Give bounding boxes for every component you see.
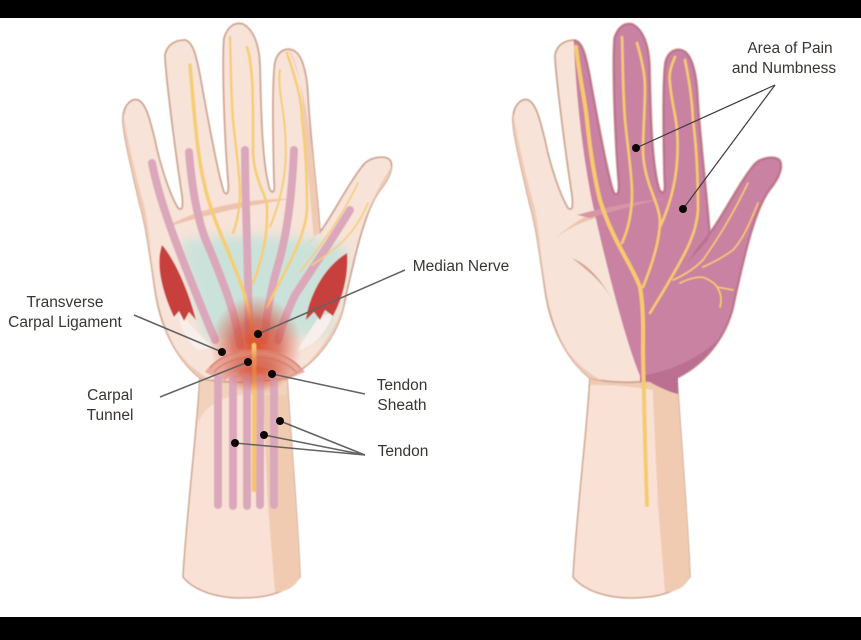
label: Area of Pain and Numbness bbox=[732, 40, 836, 77]
label: Carpal Tunnel: Tunnel bbox=[87, 407, 133, 424]
carpal glow bbox=[210, 295, 302, 395]
leader lines right bbox=[636, 85, 775, 209]
forearm tendons bbox=[218, 378, 274, 506]
left thenar muscle bbox=[159, 245, 213, 350]
carpal ligament band bbox=[205, 350, 305, 381]
leader lines left bbox=[134, 270, 405, 455]
palm tendons bbox=[152, 150, 350, 345]
right forearm bbox=[573, 375, 690, 598]
left hand silhouette bbox=[115, 23, 400, 390]
palm teal area bbox=[180, 236, 348, 340]
forearm median nerve bbox=[252, 345, 257, 490]
left hand anatomy illustration bbox=[115, 23, 400, 598]
top black bar bbox=[0, 0, 861, 18]
label: Carpal Tunnel bbox=[87, 387, 133, 424]
label: Tendon Sheath bbox=[377, 377, 427, 414]
label: Area of Pain and Numbness: Area of Pain bbox=[747, 40, 833, 57]
label: Transverse Carpal Ligament bbox=[8, 294, 123, 331]
right hand area of pain illustration bbox=[505, 20, 800, 598]
bottom black bar bbox=[0, 617, 861, 640]
pain area crease bbox=[577, 198, 667, 218]
label: Median Nerve: Median Nerve bbox=[413, 258, 509, 275]
pain area bbox=[573, 23, 782, 394]
left forearm bbox=[183, 375, 300, 598]
right hand silhouette bbox=[505, 23, 782, 390]
wrist glow bbox=[222, 348, 290, 392]
label: Transverse Carpal Ligament: Carpal Ligament bbox=[8, 314, 123, 331]
label: Transverse Carpal Ligament: Transverse bbox=[27, 294, 103, 311]
right hand nerves bbox=[576, 37, 758, 505]
label: Carpal Tunnel: Carpal bbox=[87, 387, 133, 404]
left hand nerves bbox=[190, 37, 368, 345]
label: Tendon: Tendon bbox=[378, 443, 428, 460]
label: Tendon Sheath: Sheath bbox=[377, 397, 427, 414]
label: Tendon Sheath: Tendon bbox=[377, 377, 427, 394]
callout dots bbox=[218, 144, 687, 447]
right thenar muscle bbox=[296, 253, 347, 352]
label: Area of Pain and Numbness: and Numbness bbox=[732, 60, 836, 77]
